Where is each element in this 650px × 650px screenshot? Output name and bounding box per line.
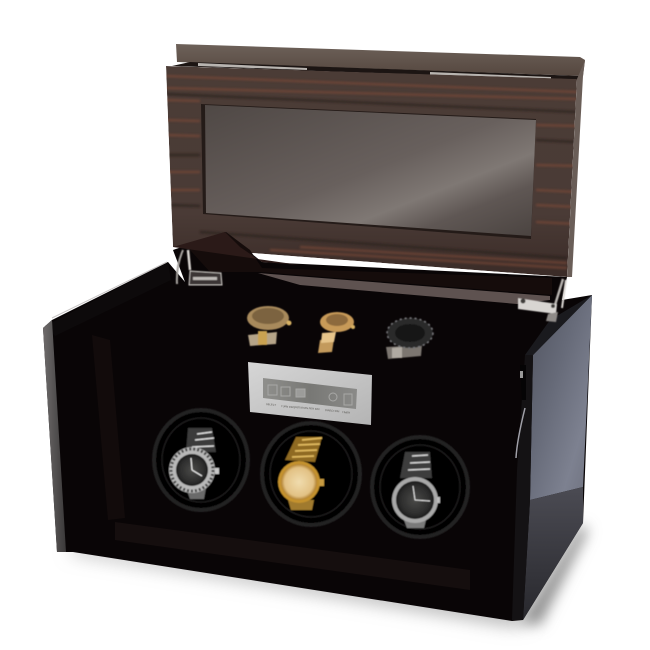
lcd display <box>263 378 357 409</box>
lid <box>166 44 585 277</box>
lid window glass <box>201 104 536 239</box>
lid wood frame <box>166 66 577 277</box>
product photo illustration <box>43 44 594 636</box>
winder ring <box>372 437 468 537</box>
bracelet <box>400 452 432 478</box>
watch face <box>169 447 215 493</box>
lid underside reflection <box>173 232 552 304</box>
lid right side edge <box>567 60 585 277</box>
panel plate <box>248 362 372 425</box>
floor shadow <box>70 525 588 625</box>
watch face <box>392 477 438 523</box>
control panel: TIMER <box>342 410 350 415</box>
winder 3 <box>372 437 468 537</box>
left side face <box>43 262 171 552</box>
lid top edge <box>176 44 585 76</box>
lid hinge strips <box>198 63 551 79</box>
panel labels: SELECT <box>266 402 277 407</box>
right gloss edge <box>512 355 533 620</box>
left gloss edge <box>43 320 66 552</box>
control panel: TURN DIRS <box>281 404 296 409</box>
winder 2 <box>262 423 360 525</box>
hinge: right <box>518 279 566 322</box>
box body silhouette <box>43 232 592 621</box>
right top rail <box>525 295 592 355</box>
watch face <box>278 461 320 503</box>
watch: black diver <box>386 318 433 359</box>
control panel: DIRECTION <box>325 408 340 413</box>
gold bracelet <box>285 437 322 462</box>
resting watches <box>247 306 433 359</box>
lid edge shadow gap <box>172 62 583 80</box>
right face lower reflection <box>523 487 583 620</box>
watch: gold small <box>318 312 355 353</box>
front panel interior bevels <box>92 335 470 590</box>
winder ring <box>262 423 360 525</box>
watch: two-tone <box>247 306 292 346</box>
winder 1 <box>154 410 248 510</box>
hinge: left <box>177 250 222 285</box>
bracelet <box>186 428 216 452</box>
winder ring <box>154 410 248 510</box>
lcd icons <box>268 385 352 405</box>
control panel <box>248 362 372 425</box>
right side face <box>512 295 592 620</box>
control panel: ROTATION PER DAY <box>295 405 320 411</box>
